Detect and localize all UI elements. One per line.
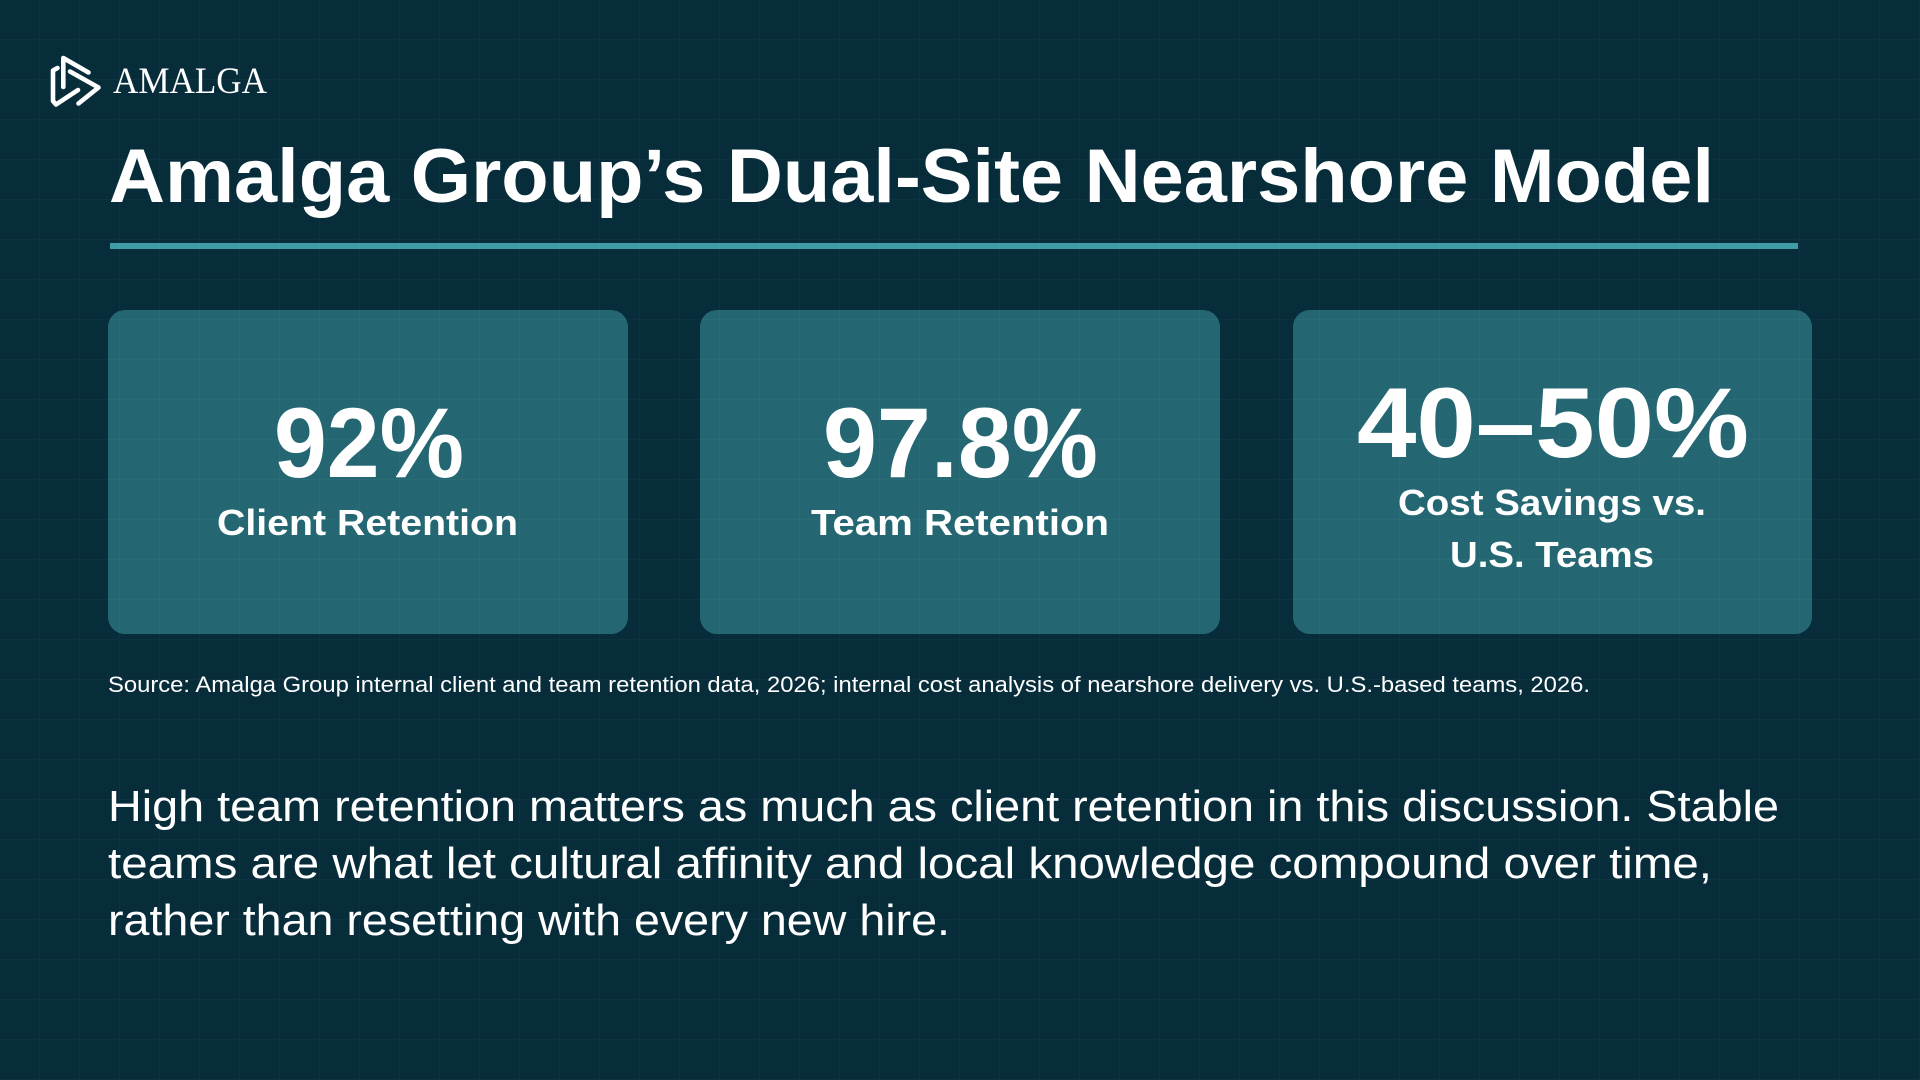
body paragraph — [108, 782, 1779, 945]
title: Amalga Group’s Dual-Site Nearshore Model — [109, 134, 1714, 219]
label: cost savings line 2: U.S. Teams — [1450, 534, 1654, 575]
body paragraph: teams are what let cultural affinity and local knowledge compound over time, — [108, 839, 1712, 888]
label: cost savings line 1: Cost Savings vs. — [1398, 482, 1706, 523]
panel: client retention — [108, 310, 628, 634]
logo wordmark: AMALGA — [113, 61, 267, 102]
label: client retention: Client Retention — [217, 502, 518, 543]
panel: cost savings — [1293, 310, 1812, 634]
stat: 40–50%: 40–50% — [1357, 367, 1749, 478]
source note: Source: Amalga Group internal client and team retention data, 2026; internal cost analysis of nearshore delivery vs. U.S.-based teams, 2026. — [108, 672, 1590, 697]
stat: 92%: 92% — [274, 387, 464, 498]
stat: 97.8%: 97.8% — [823, 387, 1098, 498]
label: team retention: Team Retention — [811, 502, 1109, 543]
icon: Amalga logo mark — [53, 58, 98, 104]
body paragraph: High team retention matters as much as client retention in this discussion. Stable — [108, 782, 1779, 831]
title rule — [110, 243, 1798, 249]
panel: team retention — [700, 310, 1220, 634]
body paragraph: rather than resetting with every new hire. — [108, 896, 950, 945]
